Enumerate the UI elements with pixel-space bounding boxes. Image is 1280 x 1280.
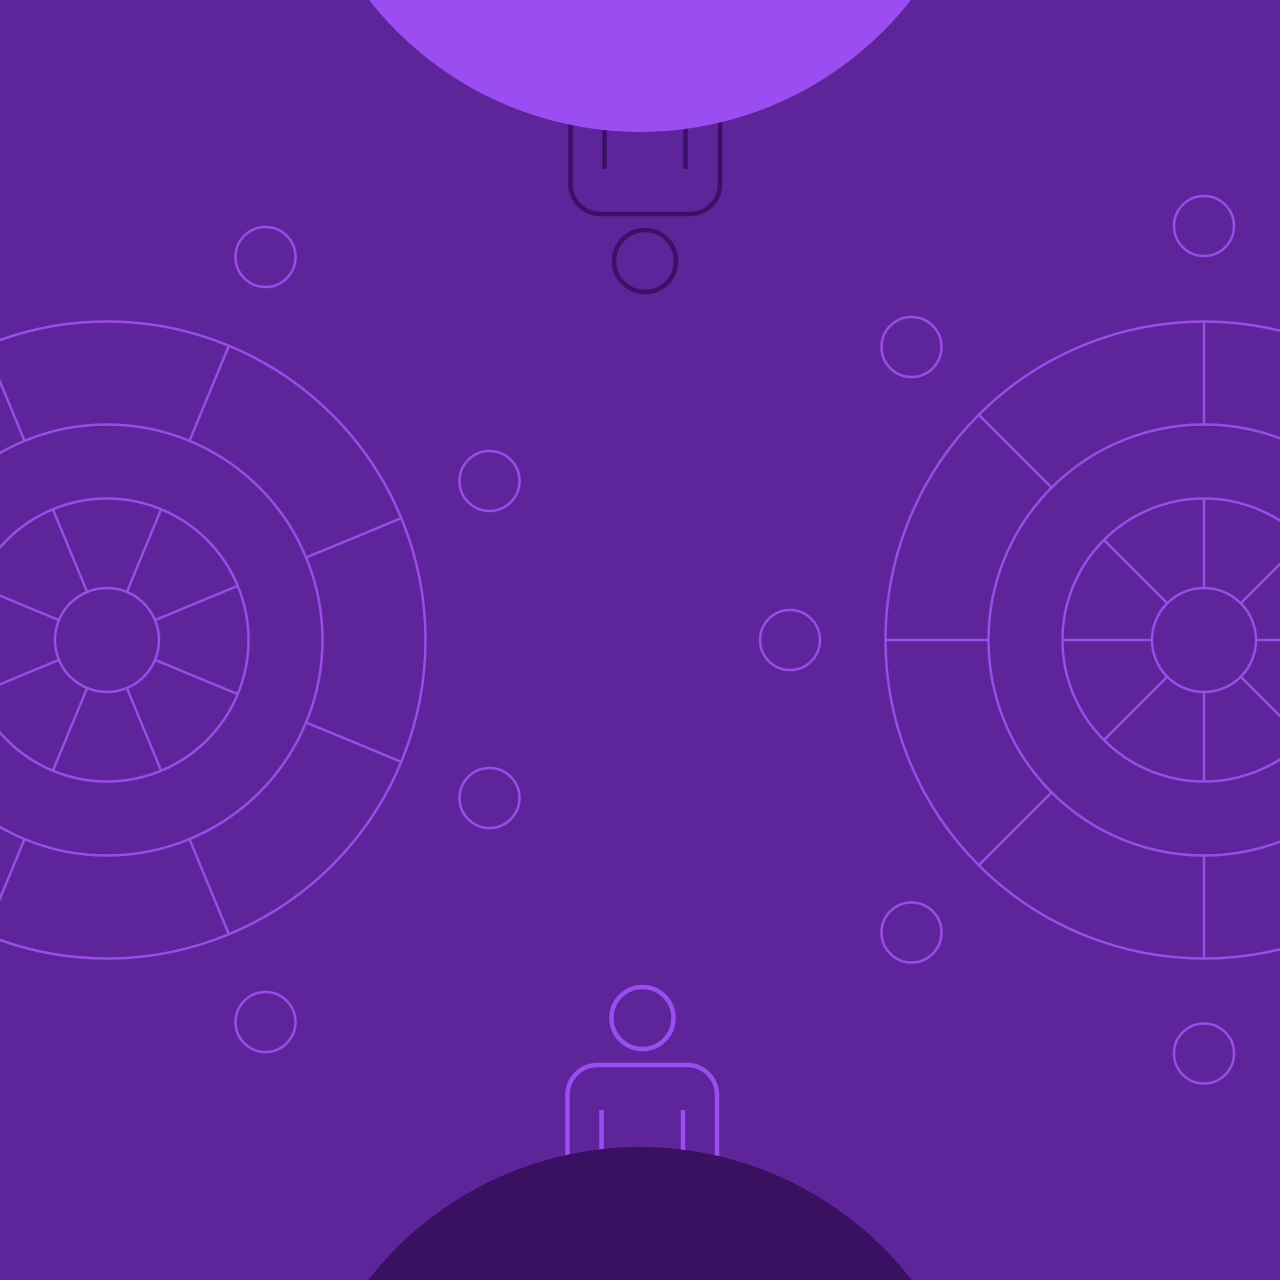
small circles <box>236 196 1234 1084</box>
bottom semicircle <box>368 1147 912 1280</box>
bottom person icon <box>568 987 717 1180</box>
top semicircle <box>369 0 911 132</box>
top person icon <box>570 100 720 292</box>
left wheel <box>0 322 426 958</box>
right wheel <box>886 322 1280 958</box>
